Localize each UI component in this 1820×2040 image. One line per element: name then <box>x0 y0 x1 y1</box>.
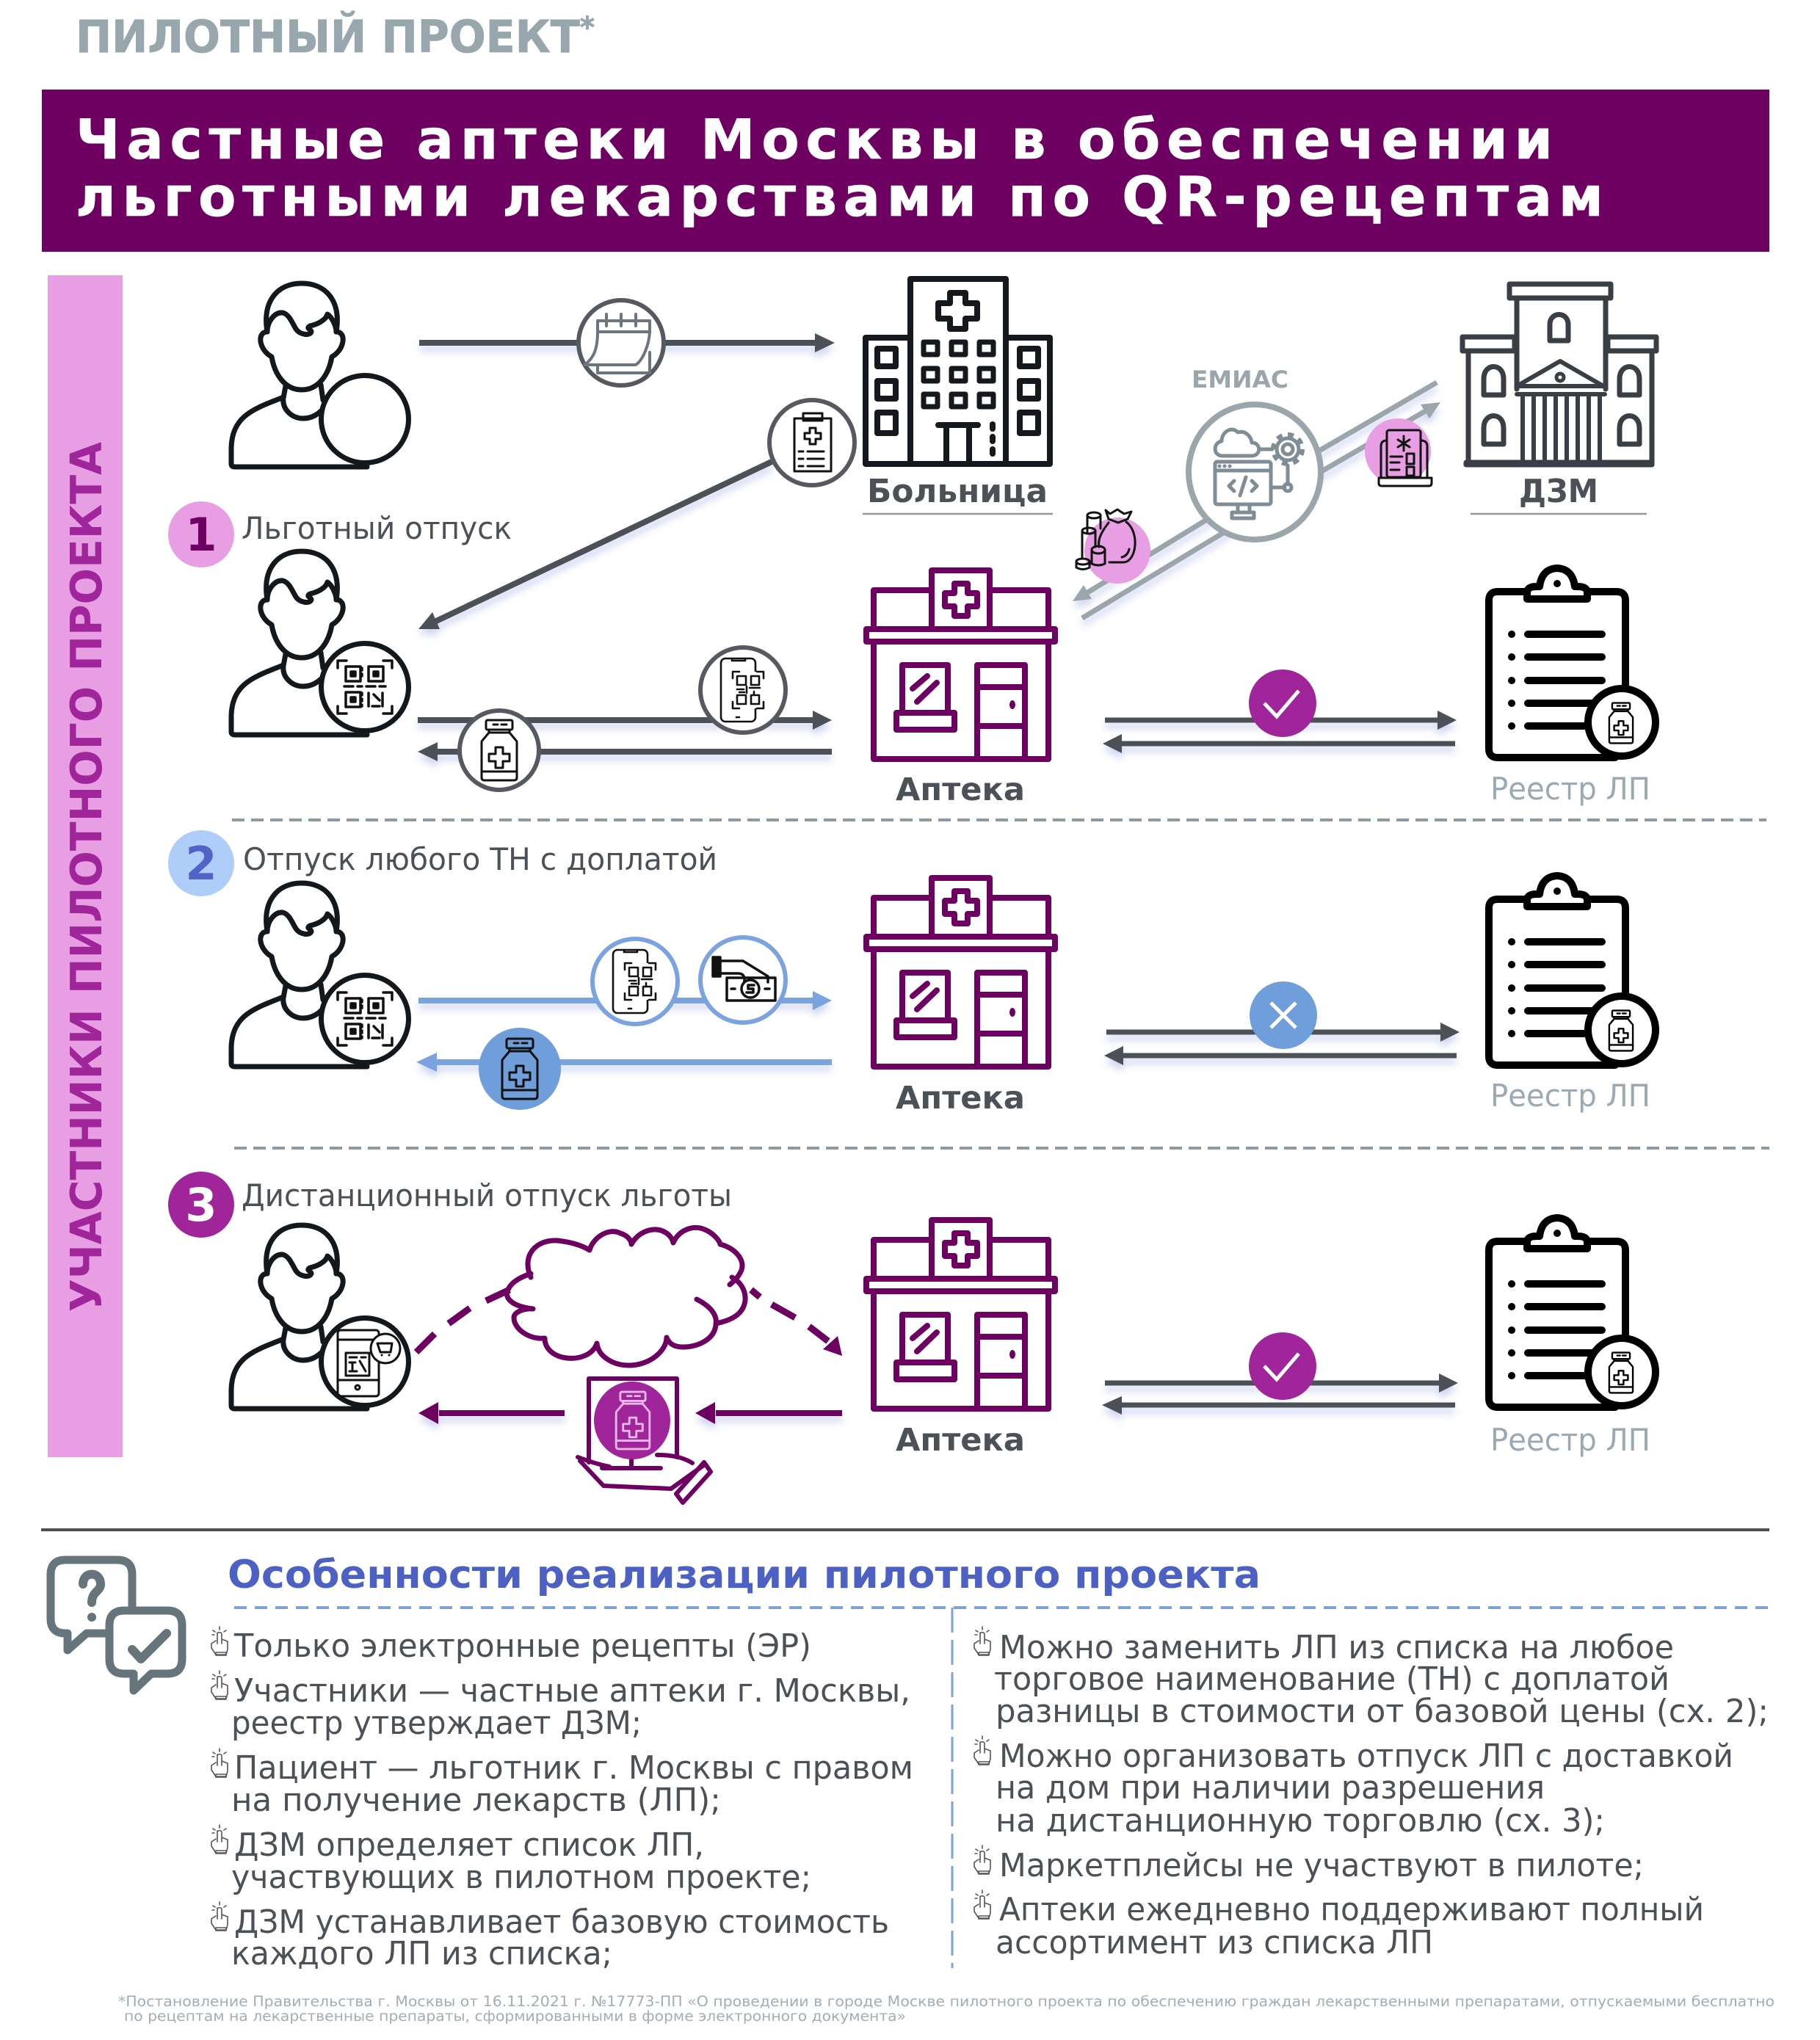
arrow: patient to hospital with calendar <box>419 300 835 385</box>
arrows: pharmacy and registry 3 <box>1102 1332 1458 1415</box>
scheme 1 title: Льготный отпуск <box>242 510 512 546</box>
DZM building icon <box>1462 284 1656 465</box>
arrows: patient and pharmacy scheme 2 <box>416 937 832 1110</box>
pharmacy icon scheme 1 <box>866 570 1055 759</box>
title banner <box>42 90 1769 252</box>
arrows: patient and pharmacy scheme 1 <box>418 647 832 790</box>
features list: left column: реестр утверждает ДЗМ; <box>231 1705 642 1742</box>
pharmacy label 1: Аптека <box>896 772 1025 808</box>
overline heading: pilot project: * <box>580 11 595 45</box>
features list: right column <box>974 1627 1769 1961</box>
pharmacy icon scheme 2 <box>866 878 1055 1067</box>
title line 1: Частные аптеки Москвы в обеспечении <box>76 107 1553 172</box>
registry label 2: Реестр ЛП <box>1490 1078 1650 1114</box>
pharmacy label 2: Аптека <box>896 1080 1025 1117</box>
hospital icon <box>866 279 1050 464</box>
icon: prescription laptop on pink <box>1365 418 1432 486</box>
features list: right column: Можно заменить ЛП из списка на любое <box>999 1629 1674 1666</box>
patient icon: top <box>231 283 408 467</box>
pharmacy icon scheme 3 <box>866 1220 1055 1409</box>
scheme 1 number <box>168 501 234 567</box>
features list: left column: Участники — частные аптеки г. Москвы, <box>234 1672 910 1710</box>
features list: right column: ассортимент из списка ЛП <box>996 1924 1433 1961</box>
EMIAS system icon <box>1189 404 1321 540</box>
scheme 2 title: Отпуск любого ТН с доплатой <box>243 841 717 877</box>
hospital label: Больница <box>867 473 1048 510</box>
footnote: по рецептам на лекарственные препараты, сформированными в форме электронного документа» <box>124 2008 906 2025</box>
registry label 3: Реестр ЛП <box>1490 1422 1650 1458</box>
DZM label: ДЗМ <box>1519 473 1598 510</box>
side panel: project participants: УЧАСТНИКИ ПИЛОТНОГО ПРОЕКТА <box>61 442 112 1312</box>
circle: QR on phone <box>592 939 678 1024</box>
pharmacy label 3: Аптека <box>896 1422 1025 1459</box>
features list: left column: ДЗМ устанавливает базовую стоимость <box>234 1903 889 1941</box>
icon: bag of money and vials on pink <box>1076 509 1150 584</box>
features list: left column: участвующих в пилотном проекте; <box>231 1859 811 1896</box>
icon: delivery hand with medicine <box>578 1379 711 1503</box>
features list: right column: Аптеки ежедневно поддерживают полный <box>999 1891 1704 1928</box>
scheme 2 number: 2 <box>185 837 217 890</box>
circle: payment <box>700 937 786 1023</box>
scheme 3 number: 3 <box>185 1178 217 1232</box>
title line 2: льготными лекарствами по QR-рецептам <box>76 164 1603 229</box>
dashed arrows via cloud <box>416 1290 842 1356</box>
features list: right column: на дистанционную торговлю (сх. 3); <box>996 1802 1605 1840</box>
circle: QR on phone <box>700 647 786 733</box>
patient icon: phone order <box>231 1225 408 1409</box>
side panel: project participants <box>48 275 123 1457</box>
features list: left column: Пациент — льготник г. Москвы с правом <box>234 1749 913 1787</box>
EMIAS label: ЕМИАС <box>1192 366 1288 393</box>
arrows: pharmacy and registry 1 <box>1103 669 1457 753</box>
registry icon 3 <box>1489 1218 1656 1407</box>
scheme 1 number: 1 <box>185 508 217 562</box>
features list: left column <box>211 1627 913 1972</box>
scheme 3 number <box>168 1172 234 1238</box>
features list: right column: на дом при наличии разрешения <box>996 1769 1545 1807</box>
arrow: prescription to patient <box>418 400 855 629</box>
arrows: pharmacy to courier to patient <box>418 1402 842 1424</box>
EMIAS connection lines <box>1073 382 1440 618</box>
features list: right column: Можно организовать отпуск ЛП с доставкой <box>999 1738 1733 1775</box>
footnote <box>118 1993 1774 2025</box>
registry icon 2 <box>1489 876 1656 1065</box>
features list: right column: торговое наименование (ТН) с доплатой <box>994 1660 1669 1698</box>
features list: right column: разницы в стоимости от базовой цены (сх. 2); <box>996 1693 1769 1730</box>
overline heading: pilot project: ПИЛОТНЫЙ ПРОЕКТ <box>76 11 600 63</box>
icon: question and check speech bubbles <box>51 1560 182 1691</box>
features heading: Особенности реализации пилотного проекта <box>228 1553 1261 1597</box>
features list: right column: Маркетплейсы не участвуют в пилоте; <box>999 1847 1644 1884</box>
scheme 3 title: Дистанционный отпуск льготы <box>242 1177 732 1213</box>
arrows: pharmacy and registry 2 <box>1104 981 1460 1065</box>
circle: medicine blue <box>479 1028 561 1110</box>
cloud: online ordering <box>507 1227 745 1365</box>
scheme 2 number <box>168 830 234 896</box>
registry label 1: Реестр ЛП <box>1490 771 1650 807</box>
circle: medicine <box>460 711 539 790</box>
features list: left column: каждого ЛП из списка; <box>231 1935 612 1972</box>
features list: left column: Только электронные рецепты (ЭР) <box>233 1627 811 1665</box>
patient icon: QR 2 <box>231 883 408 1067</box>
patient icon: QR <box>231 551 408 735</box>
footnote: *Постановление Правительства г. Москвы от 16.11.2021 г. №17773-ПП «О проведении в городе Москве пилотного проекта по обеспечению граждан лекарственными препаратами, отпускаемыми бесплатно <box>118 1993 1774 2010</box>
registry icon 1 <box>1489 568 1656 758</box>
features list: left column: ДЗМ определяет список ЛП, <box>234 1826 704 1864</box>
features list: left column: на получение лекарств (ЛП); <box>231 1782 721 1819</box>
